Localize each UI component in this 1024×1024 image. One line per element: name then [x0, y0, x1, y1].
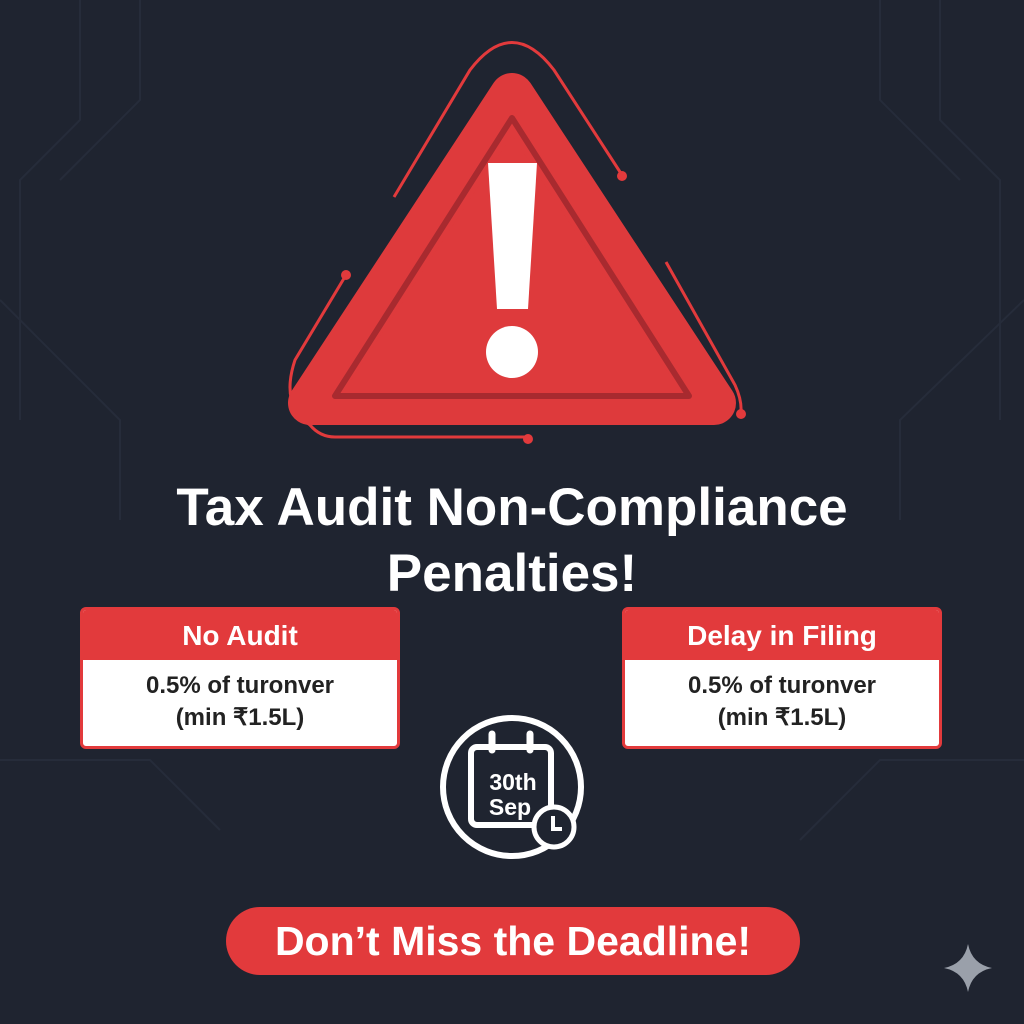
circuit accents [290, 42, 741, 437]
card: delay in filing [622, 607, 942, 749]
icon: sparkle [944, 944, 992, 992]
button: deadline: Don’t Miss the Deadline! [275, 918, 751, 964]
button: deadline [226, 907, 800, 975]
card: no audit [80, 607, 400, 749]
title: Tax Audit Non-Compliance [176, 478, 848, 537]
card: delay in filing: 0.5% of turonver [688, 672, 876, 699]
card: delay in filing: Delay in Filing [687, 620, 877, 651]
card: delay in filing: (min ₹1.5L) [718, 704, 846, 731]
warning triangle icon [288, 41, 746, 444]
title: Penalties! [387, 544, 637, 603]
card: no audit: 0.5% of turonver [146, 672, 334, 699]
card: no audit: No Audit [182, 620, 298, 651]
icon: calendar 30th Sep [440, 715, 584, 859]
icon: calendar 30th Sep: Sep [489, 794, 531, 820]
title [176, 478, 848, 603]
exclamation mark [488, 163, 537, 309]
card: no audit: (min ₹1.5L) [176, 704, 304, 731]
icon: calendar 30th Sep: 30th [489, 769, 537, 795]
